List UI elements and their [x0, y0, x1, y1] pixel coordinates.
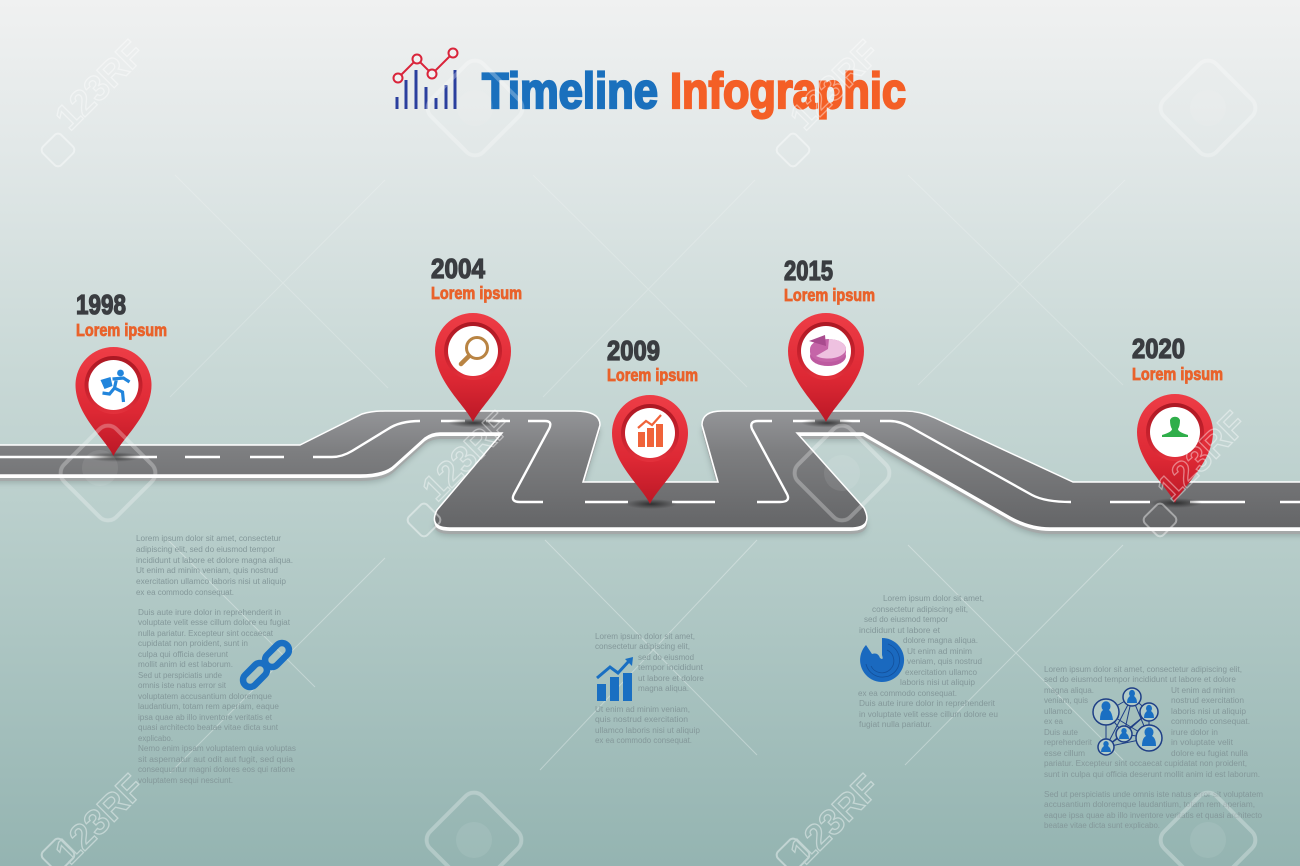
text block 2: ex ea commodo consequat.	[595, 736, 692, 745]
text block 1: mollit anim id est laborum.	[138, 660, 233, 669]
text block 4: nostrud exercitation	[1171, 696, 1244, 705]
year: 2009	[607, 335, 660, 366]
pin with person icon	[1137, 394, 1213, 508]
subtitle: Lorem ipsum	[431, 283, 522, 303]
text block 1: ex ea commodo consequat.	[136, 588, 234, 597]
text block 4: Ut enim ad minim	[1171, 686, 1235, 695]
watermark logos: 123RF	[1149, 403, 1254, 509]
text block 3: fugiat nulla pariatur.	[859, 720, 932, 729]
milestone 2004	[431, 253, 522, 428]
text block 1: omnis iste natus error sit	[138, 681, 227, 690]
text block 1: exercitation ullamco laboris nisi ut aliquip	[136, 577, 287, 586]
text block 4: beatae vitae dicta sunt explicabo.	[1044, 821, 1160, 830]
text block 3: laboris nisi ut aliquip	[900, 678, 976, 687]
text block 1: voluptatem sequi nesciunt.	[138, 776, 233, 785]
text block 4: irure dolor in	[1171, 728, 1218, 737]
text block 1: Duis aute irure dolor in reprehenderit in	[138, 608, 281, 617]
watermark logos: 123RF	[782, 32, 887, 138]
text block 4: reprehenderit	[1044, 738, 1093, 747]
road	[0, 411, 1300, 536]
icon: growth chart	[597, 657, 633, 701]
text block 2	[595, 632, 705, 745]
pin with runner icon	[76, 347, 152, 462]
road drop shadow	[0, 419, 1300, 536]
text block 4: accusantium doloremque laudantium, totam rem aperiam,	[1044, 800, 1255, 809]
text block 3: veniam, quis nostrud	[907, 657, 982, 666]
text block 4: eaque ipsa quae ab illo inventore veritatis et quasi architecto	[1044, 811, 1263, 820]
icon: chain link	[240, 640, 292, 690]
text block 2: Lorem ipsum dolor sit amet,	[595, 632, 695, 641]
text block 4: Lorem ipsum dolor sit amet, consectetur adipiscing elit,	[1044, 665, 1242, 674]
text block 2: magna aliqua.	[638, 684, 689, 693]
text block 3: dolore magna aliqua.	[903, 636, 978, 645]
text block 1: voluptatem accusantium doloremque	[138, 692, 273, 701]
text block 1: quasi architecto beatae vitae dicta sunt	[138, 723, 279, 732]
road surface	[0, 411, 1300, 528]
milestone 2015	[784, 255, 875, 428]
text block 4: sed do eiusmod tempor incididunt ut labore et dolore	[1044, 675, 1237, 684]
text block 4: esse cillum	[1044, 749, 1085, 758]
background cross lines	[168, 175, 1125, 773]
title	[394, 48, 906, 119]
text block 4: pariatur. Excepteur sint occaecat cupidatat non proident,	[1044, 759, 1247, 768]
text block 3: Lorem ipsum dolor sit amet,	[883, 594, 984, 603]
text block 4: sunt in culpa qui officia deserunt mollit anim id est laborum.	[1044, 770, 1260, 779]
text block 4: veniam, quis	[1044, 696, 1088, 705]
text block 3: Ut enim ad minim	[907, 647, 972, 656]
text block 1: Ut enim ad minim veniam, quis nostrud	[136, 566, 278, 575]
text block 1: laudantium, totam rem aperiam, eaque	[138, 702, 280, 711]
text block 4: Sed ut perspiciatis unde omnis iste natus error sit voluptatem	[1044, 790, 1263, 799]
text block 1: sit aspernatur aut odit aut fugit, sed quia	[138, 755, 294, 764]
milestone 2009	[607, 335, 698, 509]
text block 2: ullamco laboris nisi ut aliquip	[595, 726, 701, 735]
text block 3: Duis aute irure dolor in reprehenderit	[859, 699, 996, 708]
subtitle: Lorem ipsum	[76, 320, 167, 340]
title word: Infographic: Infographic	[670, 63, 906, 119]
pin with bar chart icon	[612, 395, 688, 509]
text block 1: voluptate velit esse cillum dolore eu fugiat	[138, 618, 291, 627]
text block 4: dolore eu fugiat nulla	[1171, 749, 1249, 758]
text block 4: ex ea	[1044, 717, 1064, 726]
title icon: bars and trend line	[394, 48, 458, 109]
pin with pie chart icon	[788, 313, 864, 428]
text block 1: Lorem ipsum dolor sit amet, consectetur	[136, 534, 281, 543]
text block 2: consectetur adipiscing elit,	[595, 642, 690, 651]
text block 1: consequuntur magni dolores eos qui ratione	[138, 765, 296, 774]
text block 4: commodo consequat.	[1171, 717, 1250, 726]
text block 2: tempor incididunt	[638, 663, 704, 672]
icon: people network	[1093, 688, 1162, 755]
text block 1	[136, 534, 296, 785]
text block 3: consectetur adipiscing elit,	[872, 605, 968, 614]
text block 3: in voluptate velit esse cillum dolore eu	[859, 710, 998, 719]
text block 3: incididunt ut labore et	[859, 626, 941, 635]
text block 1: Sed ut perspiciatis unde	[138, 671, 223, 680]
text block 3: sed do eiusmod tempor	[864, 615, 948, 624]
year: 2020	[1132, 333, 1185, 364]
text block 4: magna aliqua.	[1044, 686, 1094, 695]
text block 2: sed do eiusmod	[638, 653, 694, 662]
text block 2: ut labore et dolore	[638, 674, 705, 683]
subtitle: Lorem ipsum	[784, 285, 875, 305]
text block 1: explicabo.	[138, 734, 173, 743]
milestone 2020	[1132, 333, 1223, 508]
title word: Timeline: Timeline	[482, 63, 658, 119]
milestone 1998	[76, 289, 167, 462]
year: 2015	[784, 255, 833, 286]
text block 1: adipiscing elit, sed do eiusmod tempor	[136, 545, 275, 554]
year: 1998	[76, 289, 126, 320]
text block 3: exercitation ullamco	[905, 668, 978, 677]
text block 4	[1044, 665, 1263, 830]
icon: concentric ring chart	[860, 638, 904, 682]
text block 4: ullamco	[1044, 707, 1073, 716]
watermark logos: 123RF	[414, 403, 519, 509]
pin with magnifier icon	[435, 313, 511, 428]
subtitle: Lorem ipsum	[607, 365, 698, 385]
year: 2004	[431, 253, 485, 284]
text block 2: quis nostrud exercitation	[595, 715, 688, 724]
text block 1: culpa qui officia deserunt	[138, 650, 229, 659]
text block 4: laboris nisi ut aliquip	[1171, 707, 1247, 716]
text block 4: in voluptate velit	[1171, 738, 1234, 747]
text block 1: ipsa quae ab illo inventore veritatis et	[138, 713, 273, 722]
road shoulder white	[0, 414, 1300, 531]
text block 1: nulla pariatur. Excepteur sint occaecat	[138, 629, 274, 638]
text block 4: Duis aute	[1044, 728, 1079, 737]
text block 3	[858, 594, 998, 729]
text block 1: Nemo enim ipsam voluptatem quia voluptas	[138, 744, 296, 753]
road shoulder grey	[0, 417, 1300, 534]
text block 3: ex ea commodo consequat.	[858, 689, 957, 698]
text block 1: incididunt ut labore et dolore magna aliqua.	[136, 556, 293, 565]
subtitle: Lorem ipsum	[1132, 364, 1223, 384]
road centre markings	[0, 421, 1300, 502]
text block 2: Ut enim ad minim veniam,	[595, 705, 690, 714]
text block 1: cupidatat non proident, sunt in	[138, 639, 248, 648]
watermark logos: 123RF	[47, 32, 152, 138]
